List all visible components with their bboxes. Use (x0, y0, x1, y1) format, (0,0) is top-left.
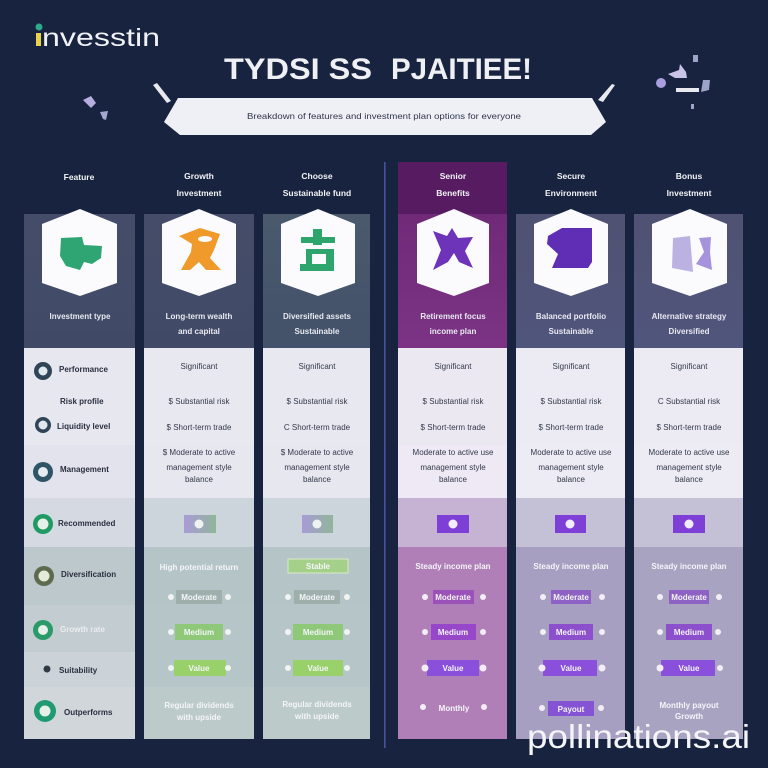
column 2 row text: balance (185, 475, 214, 484)
column 6 button (673, 515, 705, 533)
column 3 pills (282, 559, 352, 721)
decorative sparkles right (598, 55, 710, 109)
column 3 heading: Choose (301, 171, 333, 181)
column 6 pills (651, 562, 727, 721)
column 4 caption: income plan (430, 327, 476, 336)
column 2 row text: $ Substantial risk (169, 397, 230, 406)
column 4 row text: $ Substantial risk (423, 397, 484, 406)
title: TYDSI SS (224, 53, 372, 86)
column 6 row text: Significant (671, 362, 708, 371)
row labels: Risk profile (60, 397, 104, 406)
column 3 row text: management style (284, 463, 350, 472)
column 4 pills: Medium (438, 628, 468, 637)
column 1 caption: Investment type (50, 312, 111, 321)
watermark: pollinations.ai (527, 718, 750, 755)
column 4 hexagon icon (417, 209, 489, 296)
column 4 row text: Significant (435, 362, 472, 371)
column 5 row text: $ Short-term trade (539, 423, 604, 432)
column 4 row text: management style (420, 463, 486, 472)
column 3 caption: Sustainable (295, 327, 340, 336)
column 4 pills (415, 562, 491, 713)
title: PJAITIEE! (391, 53, 532, 86)
column 3 pills: Medium (303, 628, 333, 637)
column 5 row text: management style (538, 463, 604, 472)
column 4 heading: Benefits (436, 188, 470, 198)
column 5 button (555, 515, 586, 533)
column 5 pills: Medium (556, 628, 586, 637)
column 4 heading band (398, 162, 507, 214)
column 6 pills: Value (679, 664, 700, 673)
column 2 row text: $ Moderate to active (163, 448, 236, 457)
column 6 row text: balance (675, 475, 704, 484)
column 2 pills: Medium (184, 628, 214, 637)
row labels: Outperforms (64, 708, 113, 717)
column 2 row text: $ Short-term trade (167, 423, 232, 432)
column 6 rows (634, 348, 743, 739)
column 6 pills: Moderate (671, 593, 707, 602)
column 3 row text: Significant (299, 362, 336, 371)
column 2 button (184, 515, 216, 533)
column 2 pills: with upside (176, 713, 222, 722)
column 3 rows (263, 348, 370, 739)
column 2 heading: Growth (184, 171, 214, 181)
column 3 pills: Stable (306, 562, 331, 571)
column 2 pills: High potential return (160, 563, 238, 572)
panel: column 6 (634, 171, 743, 739)
column 4 row text: $ Short-term trade (421, 423, 486, 432)
subtitle banner (164, 98, 606, 135)
column 4 card (398, 214, 507, 348)
panel: column 5 (516, 171, 625, 739)
column 3 heading: Sustainable fund (283, 188, 351, 198)
column 1 rows (24, 348, 135, 739)
column 1 hexagon icon (42, 209, 117, 296)
column 2 pills: Moderate (181, 593, 217, 602)
column 5 pills (533, 562, 609, 716)
column 2 row text: management style (166, 463, 232, 472)
column 2 row text: Significant (181, 362, 218, 371)
column 6 row text: $ Short-term trade (657, 423, 722, 432)
column 6 heading: Bonus (676, 171, 702, 181)
column 3 pills: Value (308, 664, 329, 673)
column 3 pills: with upside (294, 712, 340, 721)
column 2 rows (144, 348, 254, 739)
column 6 pills: Monthly payout (659, 701, 719, 710)
column 6 pills: Medium (674, 628, 704, 637)
row labels: Management (60, 465, 109, 474)
column 6 row text: Moderate to active use (649, 448, 730, 457)
column 4 row text: Moderate to active use (413, 448, 494, 457)
column 4 caption: Retirement focus (420, 312, 486, 321)
center divider (384, 162, 386, 748)
column 4 rows (398, 348, 507, 739)
column 3 row text: $ Moderate to active (281, 448, 354, 457)
column 3 pills: Regular dividends (282, 700, 352, 709)
column 5 card (516, 214, 625, 348)
column 3 row text (281, 362, 354, 484)
column 4 button (437, 515, 469, 533)
column 1 card (24, 214, 135, 348)
column 2 caption: and capital (178, 327, 220, 336)
column 5 row text: Moderate to active use (531, 448, 612, 457)
decorative sparkles left (83, 83, 171, 120)
column 2 pills: Value (189, 664, 210, 673)
column 3 row text: C Short-term trade (284, 423, 351, 432)
column 3 hexagon icon (281, 209, 355, 296)
column 4 row text (413, 362, 494, 484)
column 3 pills: Moderate (299, 593, 335, 602)
column 5 heading: Secure (557, 171, 585, 181)
column 4 heading: Senior (440, 171, 466, 181)
column 5 hexagon icon (534, 209, 608, 296)
column 1 heading: Feature (64, 172, 95, 182)
subtitle banner: Breakdown of features and investment plan options for everyone (247, 111, 521, 121)
column 6 caption: Alternative strategy (652, 312, 726, 321)
row labels: Performance (59, 365, 108, 374)
column 5 pills: Value (561, 664, 582, 673)
column 6 card (634, 214, 743, 348)
column 3 caption: Diversified assets (283, 312, 351, 321)
column 2 hexagon icon (162, 209, 236, 296)
row labels (57, 365, 116, 717)
column 2 pills (160, 563, 238, 722)
column 4 pills: Moderate (435, 593, 471, 602)
panel: column 2 (144, 171, 254, 739)
column 5 row text (531, 362, 612, 484)
column 3 row text: $ Substantial risk (287, 397, 348, 406)
column 6 hexagon icon (652, 209, 727, 296)
column 4 row text: balance (439, 475, 468, 484)
panel: column 1 (24, 172, 135, 739)
row labels: Liquidity level (57, 422, 110, 431)
column 5 pills: Steady income plan (533, 562, 609, 571)
column 5 caption: Balanced portfolio (536, 312, 606, 321)
column 5 pills: Moderate (553, 593, 589, 602)
panel: column 4 (398, 162, 507, 739)
column 4 pills: Monthly (439, 704, 470, 713)
column 6 pills: Steady income plan (651, 562, 727, 571)
column 5 row text: Significant (553, 362, 590, 371)
column 6 caption: Diversified (669, 327, 710, 336)
column 3 card (263, 214, 370, 348)
column 5 row text: $ Substantial risk (541, 397, 602, 406)
column 2 pills: Regular dividends (164, 701, 234, 710)
column 4 pills: Steady income plan (415, 562, 491, 571)
column 6 heading: Investment (667, 188, 712, 198)
column 2 heading: Investment (177, 188, 222, 198)
logo: nvesstin (42, 24, 160, 52)
panel: column 3 (263, 171, 370, 739)
column 5 pills: Payout (558, 705, 585, 714)
row labels: Recommended (58, 519, 115, 528)
column 3 button (302, 515, 333, 533)
column 6 row text (649, 362, 730, 484)
row labels: Growth rate (60, 625, 105, 634)
column 5 heading: Environment (545, 188, 597, 198)
column 5 caption: Sustainable (549, 327, 594, 336)
column 2 caption: Long-term wealth (166, 312, 232, 321)
title (224, 53, 532, 86)
row icons (33, 362, 56, 722)
column 5 rows (516, 348, 625, 739)
column 6 row text: C Substantial risk (658, 397, 721, 406)
column 2 card (144, 214, 254, 348)
column 3 row text: balance (303, 475, 332, 484)
row labels: Suitability (59, 666, 98, 675)
column 6 pills: Growth (675, 712, 703, 721)
column 4 pills: Value (443, 664, 464, 673)
column 6 row text: management style (656, 463, 722, 472)
column 5 row text: balance (557, 475, 586, 484)
row labels: Diversification (61, 570, 116, 579)
column 2 row text (163, 362, 236, 484)
